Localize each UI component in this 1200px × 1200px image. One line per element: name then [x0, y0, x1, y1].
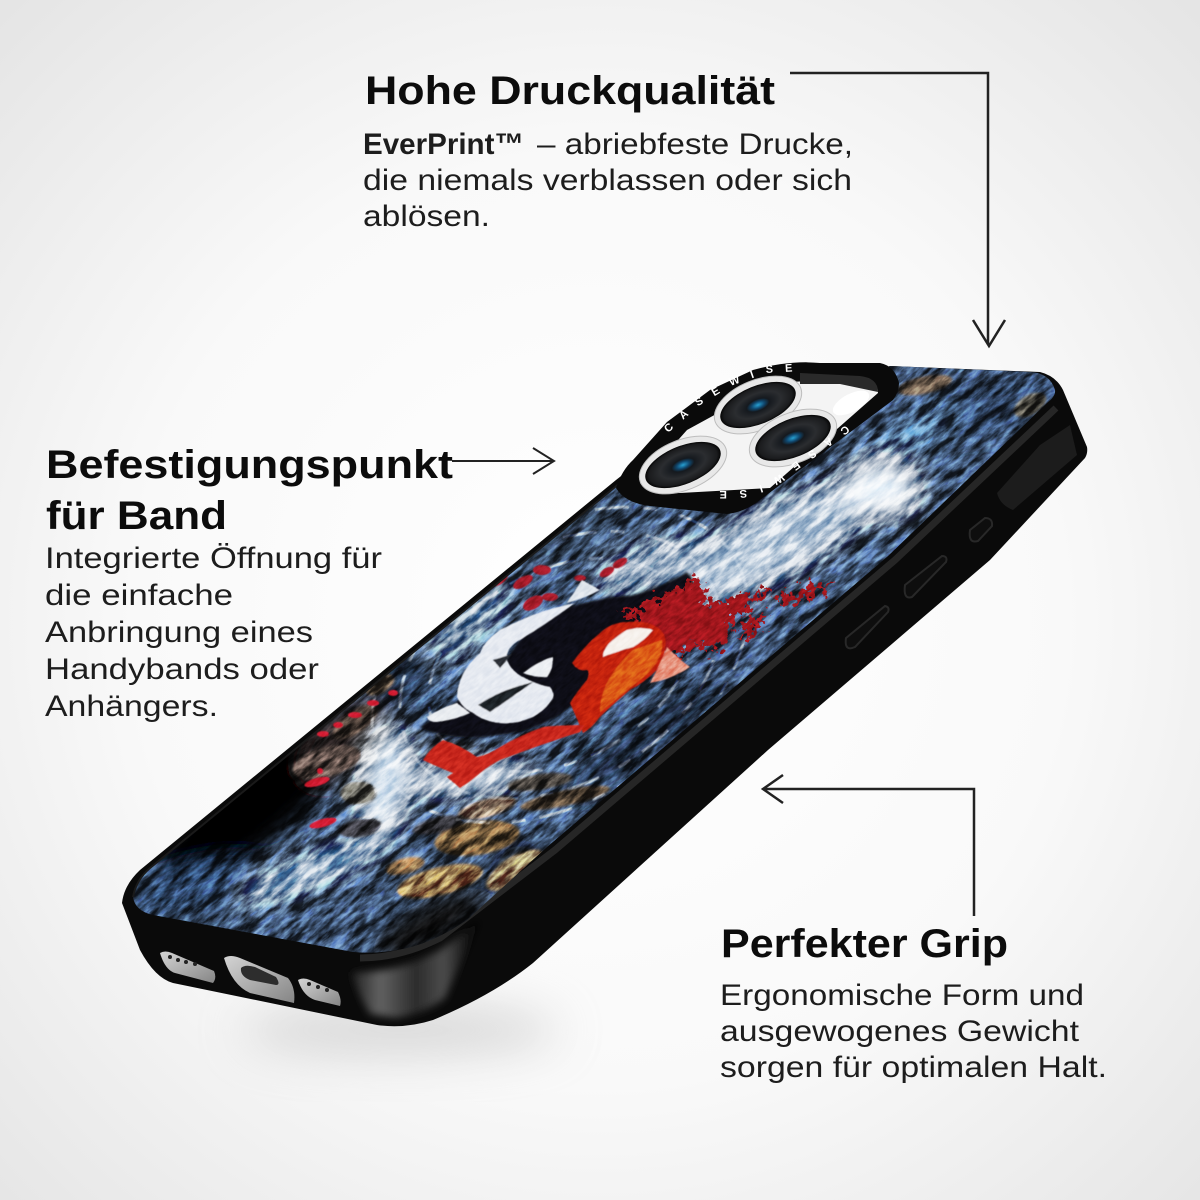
silent switch: [970, 518, 992, 542]
heading: [46, 443, 453, 538]
side buttons: [846, 518, 992, 648]
right lens: [741, 398, 845, 478]
arrow: grip: [763, 775, 974, 916]
white koi upper fin: [567, 580, 600, 603]
body text: Anhängers.: [45, 690, 218, 723]
body text: Integrierte Öffnung für: [45, 542, 382, 575]
red splatter: [625, 577, 832, 660]
black yin swirl: [420, 572, 694, 738]
white koi dorsal fin: [523, 657, 553, 677]
red blossoms on rocks: [303, 690, 398, 830]
charging port opening: [241, 966, 278, 985]
red koi long tail: [423, 725, 585, 788]
camera window: [640, 378, 878, 493]
arrow: strap attachment: [452, 448, 554, 474]
artwork colour masses: [125, 365, 1074, 977]
flash: [829, 386, 873, 420]
left lens: [631, 425, 735, 505]
water brush texture: [133, 366, 1056, 953]
body text: die niemals verblassen oder sich: [363, 164, 852, 197]
speaker holes: [168, 955, 329, 992]
side rim band: [360, 408, 1056, 958]
callout: strap attachment: [45, 443, 453, 723]
body text: [720, 979, 1107, 1084]
body text: ausgewogenes Gewicht: [720, 1015, 1080, 1048]
red koi orange scales: [600, 640, 662, 712]
rocks: [289, 370, 1051, 905]
charging port: [224, 956, 294, 1003]
ring lettering: CASEWISE: [664, 364, 792, 432]
left speaker grille: [160, 952, 215, 983]
body text: ablösen.: [363, 200, 490, 233]
camera module: [616, 362, 899, 514]
body text: sorgen für optimalen Halt.: [720, 1051, 1107, 1084]
callout: print quality: [363, 69, 853, 233]
callout: grip: [720, 922, 1107, 1084]
red koi: [423, 622, 690, 788]
body text: Ergonomische Form und: [720, 979, 1084, 1012]
ring lettering reversed: CASEWISE: [720, 426, 849, 498]
printed koi artwork: [133, 366, 1056, 953]
top lens: [706, 365, 810, 445]
volume up: [905, 556, 946, 598]
phone case illustration: [122, 362, 1088, 1026]
white koi: [427, 580, 600, 723]
glossy side pad top right: [997, 425, 1077, 510]
drop shadow under phone: [240, 1006, 560, 1054]
white koi black markings: [478, 682, 533, 712]
arrow: print quality: [790, 73, 1005, 346]
body text: EverPrint™: [363, 128, 524, 161]
scattered red petals: [495, 557, 628, 612]
white koi tail fin: [427, 703, 470, 722]
swirl strokes: [370, 505, 750, 825]
fine paint grain: [134, 366, 1055, 952]
heading: für Band: [46, 494, 227, 538]
red koi fin: [650, 647, 690, 683]
case body: [122, 366, 1087, 1026]
body text: – abriebfeste Drucke,: [537, 128, 853, 161]
heading: Perfekter Grip: [721, 922, 1008, 966]
camera window inner shadow: [800, 373, 878, 392]
volume down: [846, 606, 889, 648]
right speaker grille: [298, 978, 341, 1006]
glossy corner bottom right: [352, 920, 480, 1018]
body text: die einfache: [45, 579, 233, 612]
heading: Befestigungspunkt: [46, 443, 453, 487]
body text: [363, 128, 853, 233]
red koi white patch: [603, 628, 653, 657]
body text: [45, 542, 382, 723]
body text: Handybands oder: [45, 653, 319, 686]
screen rim: [133, 483, 620, 897]
heading: Hohe Druckqualität: [365, 69, 775, 113]
camera ring: [616, 362, 899, 514]
body text: Anbringung eines: [45, 616, 313, 649]
